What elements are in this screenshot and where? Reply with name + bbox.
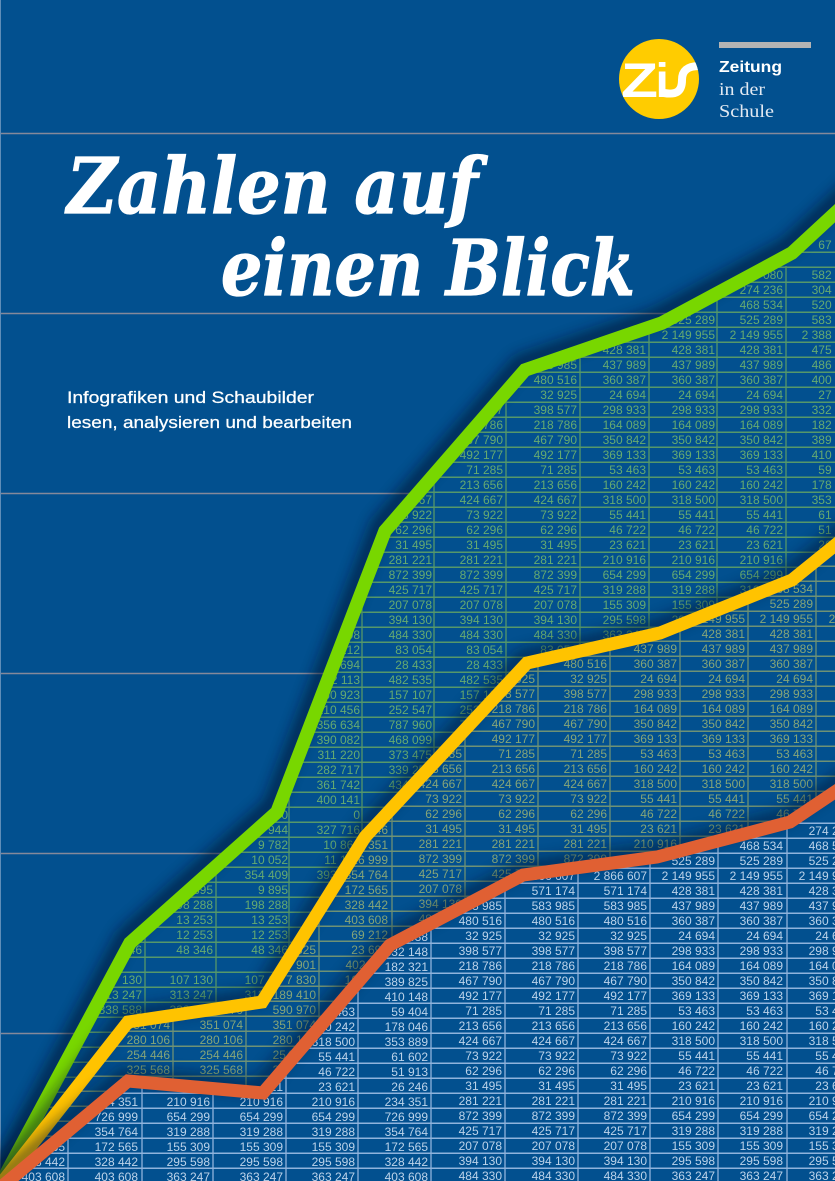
grey bar (719, 42, 811, 48)
data table: green layer above the yellow line: 48 346 107 130 313 247 338 588 (99, 943, 142, 1017)
logo wordmark: Zeitung (719, 59, 782, 76)
logo wordmark: Schule (719, 101, 774, 121)
data table: green layer above the yellow line: 583 985 480 516 32 925 398 577 218 786 467 790 492 177 71 285 213 656 424 667 73 922 62 296 31 495 281 221 872 399 425 717 207 078 394 130 484 330 83 054 28 433 482 535 157 107 252 547 787 960 468 099 (460, 358, 503, 747)
logo circle mark: i (656, 55, 669, 108)
subtitle: Infografiken und Schaubilder (67, 388, 314, 407)
data table: white layer below the orange line: 23 621 210 916 654 299 319 288 155 309 295 598 363 247 (240, 1080, 283, 1181)
data table: olive layer between yellow and orange lines: 468 534 525 289 2 149 955 428 381 437 989 360 387 24 694 298 933 164 089 350 842 369 133 53 463 160 242 318 500 55 441 46 722 23 621 (760, 582, 813, 836)
logo: Zeitung in der Schule (619, 39, 811, 121)
data table: white layer below the orange line: 2 866 607 571 174 583 985 480 516 32 925 398 577 218 786 467 790 492 177 71 285 213 656 424 667 73 922 62 296 31 495 281 221 872 399 425 717 207 078 394 130 484 330 (594, 869, 647, 1181)
data table: white layer below the orange line: 27 438 332 148 182 321 389 825 410 148 59 404 178 046 353 889 61 602 51 913 26 246 234 351 726 999 354 764 172 565 328 442 403 608 (385, 930, 428, 1181)
subtitle (67, 388, 352, 432)
data table: olive layer between yellow and orange lines: 437 989 360 387 24 694 298 933 164 089 350 842 369 133 53 463 160 242 318 500 55 441 46 722 23 621 210 916 654 299 (634, 642, 677, 866)
data table: white layer below the orange line: 583 985 480 516 32 925 398 577 218 786 467 790 492 177 71 285 213 656 424 667 73 922 62 296 31 495 281 221 872 399 425 717 207 078 394 130 484 330 (459, 899, 502, 1181)
data table: green layer above the yellow line: 9 895 198 288 13 253 12 253 48 346 107 130 313 247 338 588 (170, 883, 213, 1017)
data table: olive layer between yellow and orange lines: 2 149 955 428 381 437 989 360 387 24 694 298 933 164 089 350 842 369 133 53 463 160 242 318 500 55 441 46 722 23 621 210 916 (692, 612, 745, 851)
data table: green layer above the yellow line: 0 10 944 9 782 10 052 354 409 9 895 198 288 13 253 12 253 48 346 107 130 313 247 338 588 (245, 808, 288, 1017)
data table: white layer below the orange line: 2 866 607 571 174 583 985 480 516 32 925 398 577 218 786 467 790 492 177 71 285 213 656 424 667 73 922 62 296 31 495 281 221 872 399 425 717 207 078 394 130 484 330 (522, 869, 575, 1181)
data table: olive layer between yellow and orange lines: 32 925 398 577 218 786 467 790 492 177 71 285 213 656 424 667 73 922 62 296 31 495 281 221 872 399 425 717 207 078 394 130 (492, 672, 535, 911)
data table: olive layer between yellow and orange lines: 480 516 32 925 398 577 218 786 467 790 492 177 71 285 213 656 424 667 73 922 62 296 31 495 281 221 872 399 425 717 (564, 657, 607, 881)
logo circle mark: Z (621, 55, 658, 108)
title: einen Blick (221, 224, 635, 314)
data table: green layer above the yellow line: 403 608 69 212 23 694 402 113 160 923 210 456 356 634 390 082 311 220 282 717 361 742 400 141 0 327 716 10 869 11 192 393 764 (317, 628, 360, 882)
orange line (0, 769, 835, 1181)
data table: green layer above the yellow line: 525 289 2 149 955 428 381 437 989 360 387 24 694 298 933 164 089 350 842 369 133 53 463 160 242 318 500 55 441 46 722 23 621 210 916 654 299 319 288 155 309 295 598 (662, 313, 715, 627)
data table: green layer above the yellow line (49, 240, 835, 1108)
data table: green layer above the yellow line: 428 381 437 989 360 387 24 694 298 933 164 089 350 842 369 133 53 463 160 242 318 500 55 441 46 722 23 621 210 916 654 299 319 288 155 309 295 598 363 247 (603, 343, 646, 642)
data table: green layer above the yellow line: 523 080 274 236 468 534 525 289 2 149 955 428 381 437 989 360 387 24 694 298 933 164 089 350 842 369 133 53 463 160 242 318 500 55 441 46 722 23 621 210 916 654 299 319 288 (730, 268, 783, 597)
logo wordmark (719, 59, 782, 121)
data table: olive layer between yellow and orange lines: 71 285 213 656 424 667 73 922 62 296 31 495 281 221 872 399 425 717 207 078 394 130 484 330 (419, 747, 462, 926)
data table: white layer below the orange line: 53 463 160 242 318 500 55 441 46 722 23 621 210 916 654 299 319 288 155 309 295 598 363 247 (312, 1005, 355, 1181)
data table: white layer below the orange line (22, 822, 835, 1181)
subtitle: lesen, analysieren und bearbeiten (67, 413, 352, 432)
data table: olive layer between yellow and orange lines: 351 074 280 106 254 446 325 568 (127, 1018, 170, 1077)
data table: white layer below the orange line: 468 534 525 289 2 149 955 428 381 437 989 360 387 24 694 298 933 164 089 350 842 369 133 53 463 160 242 318 500 55 441 46 722 23 621 210 916 654 299 319 288 155 309 295 598 363 247 (730, 839, 783, 1181)
logo wordmark: in der (719, 79, 765, 99)
data table: olive layer between yellow and orange lines: 482 525 901 7 830 189 410 590 970 351 074 280 106 254 446 325 568 (273, 943, 316, 1077)
yellow line (0, 519, 835, 1181)
logo circle mark (619, 39, 700, 119)
data table: green layer above the yellow line: 583 985 480 516 32 925 398 577 218 786 467 790 492 177 71 285 213 656 424 667 73 922 62 296 31 495 281 221 872 399 425 717 207 078 394 130 484 330 83 054 28 433 482 535 157 107 252 547 787 960 468 099 373 475 339 256 434 667 (389, 358, 432, 792)
data table: olive layer between yellow and orange lines (46, 566, 835, 1137)
data table: olive layer between yellow and orange lines: 590 970 351 074 280 106 254 446 325 568 (200, 1003, 243, 1077)
data table: white layer below the orange line: 525 289 2 149 955 428 381 437 989 360 387 24 694 298 933 164 089 350 842 369 133 53 463 160 242 318 500 55 441 46 722 23 621 210 916 654 299 319 288 155 309 295 598 363 247 (662, 854, 715, 1181)
data table: olive layer between yellow and orange lines: 26 246 234 351 726 999 354 764 172 565 328 442 403 608 69 212 23 694 402 113 160 923 (345, 823, 388, 987)
title (64, 142, 635, 314)
title: Zahlen auf (64, 142, 489, 232)
data table: green layer above the yellow line: 583 985 480 516 32 925 398 577 218 786 467 790 492 177 71 285 213 656 424 667 73 922 62 296 31 495 281 221 872 399 425 717 207 078 394 130 484 330 83 054 28 433 482 535 157 107 (534, 358, 577, 702)
